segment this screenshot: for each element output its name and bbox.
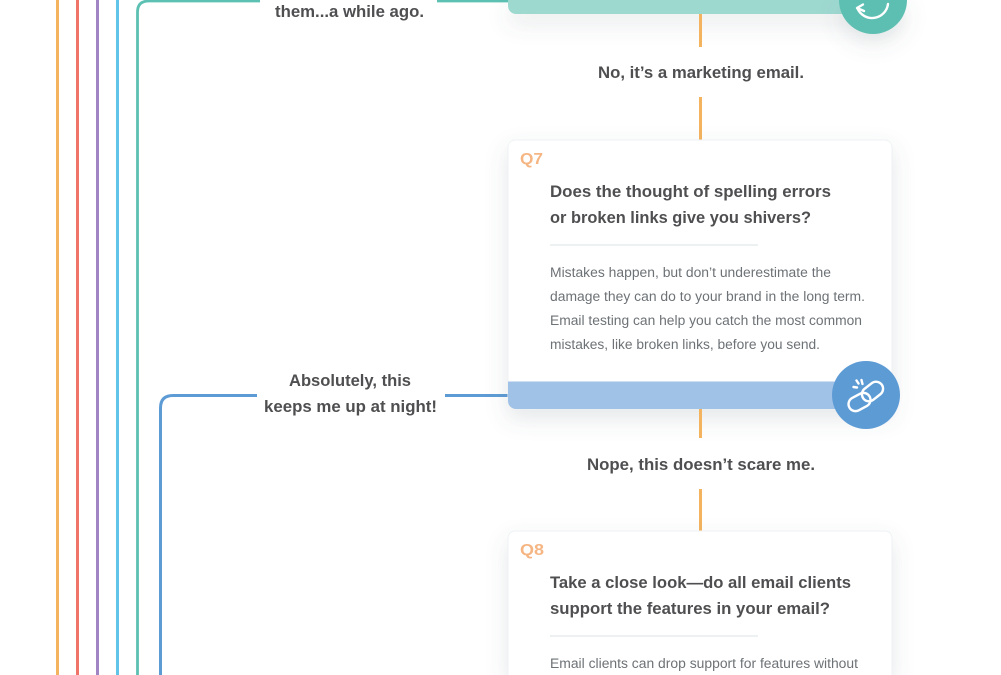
divider <box>550 635 758 637</box>
connector: answer to Q8 <box>699 489 702 532</box>
panel: previous question card footer <box>508 0 892 14</box>
connector: Q7 to answer <box>699 409 702 438</box>
question number: Q7 <box>520 151 543 168</box>
answer label: them a while ago: them...a while ago. <box>275 3 424 21</box>
question heading <box>550 182 831 227</box>
body text: mistakes, like broken links, before you send. <box>550 337 820 352</box>
icon: blue broken link badge <box>832 361 900 429</box>
question number: Q8 <box>520 542 544 559</box>
body text <box>550 265 865 352</box>
card body <box>508 140 892 409</box>
flow line: red path <box>76 0 79 675</box>
icon: teal refresh badge <box>839 0 907 34</box>
body text: Email testing can help you catch the most common <box>550 313 862 328</box>
connector: top card to answer <box>699 14 702 47</box>
answer label: does not scare me: Nope, this doesn’t scare me. <box>587 456 815 474</box>
question heading: support the features in your email? <box>550 599 830 618</box>
question heading: Does the thought of spelling errors <box>550 182 831 201</box>
card footer band <box>508 382 892 409</box>
panel: Q7 card <box>508 140 892 409</box>
flow line: teal path from previous question <box>138 1 510 675</box>
flow line: light blue path <box>116 0 119 675</box>
question heading: or broken links give you shivers? <box>550 208 811 227</box>
answer label: keeps me up at night <box>264 372 437 416</box>
question heading <box>550 573 851 618</box>
body text: Mistakes happen, but don’t underestimate the <box>550 265 831 280</box>
card body <box>508 531 892 675</box>
flow line: blue path from Q7 <box>160 396 510 675</box>
divider <box>550 244 758 246</box>
body text: Email clients can drop support for features without <box>550 656 858 671</box>
flow line: orange path <box>56 0 59 675</box>
answer label: keeps me up at night: keeps me up at night! <box>264 398 437 416</box>
answer label: keeps me up at night: Absolutely, this <box>289 372 411 390</box>
question heading: Take a close look—do all email clients <box>550 573 851 592</box>
body text: damage they can do to your brand in the long term. <box>550 289 865 304</box>
connector: answer to Q7 <box>699 97 702 141</box>
answer label: no marketing email: No, it’s a marketing email. <box>598 64 804 82</box>
flow line: purple path <box>96 0 99 675</box>
panel: Q8 card <box>508 531 892 675</box>
